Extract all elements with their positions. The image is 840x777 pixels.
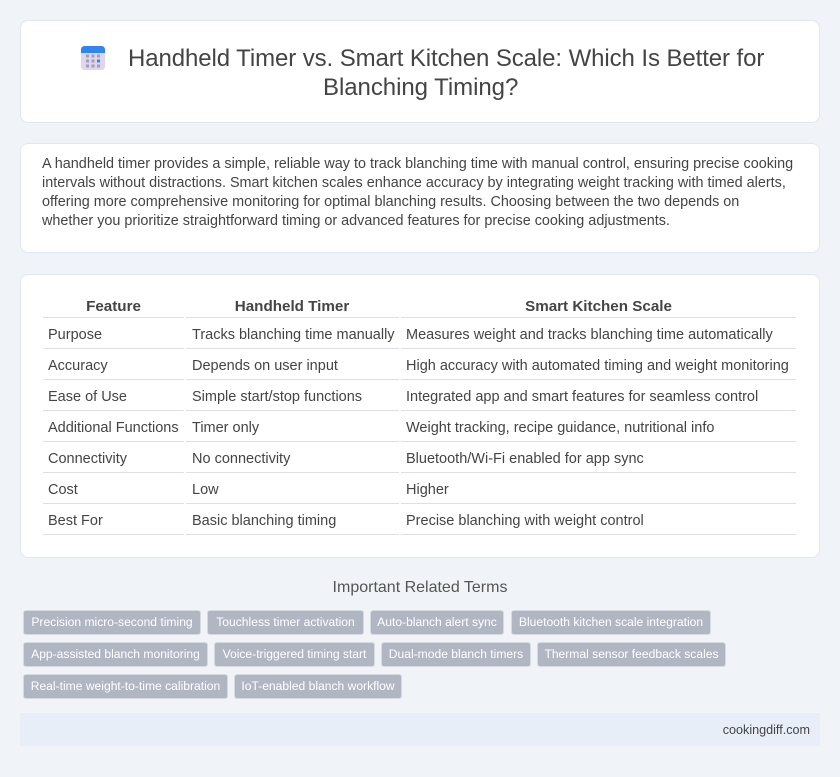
heading: main title: Blanching Timing?	[323, 74, 518, 101]
table: comparison	[43, 298, 796, 535]
table: comparison: Depends on user input	[192, 358, 338, 374]
panel: comparison table	[20, 274, 820, 558]
table: comparison: Tracks blanching time manually	[192, 327, 395, 343]
table: comparison: High accuracy with automated timing and weight monitoring	[406, 358, 789, 374]
tag group: related terms: Real-time weight-to-time calibration	[31, 679, 220, 693]
tag group: related terms: Bluetooth kitchen scale integration	[519, 615, 703, 629]
tag group: related terms: Dual-mode blanch timers	[389, 647, 523, 661]
table: comparison: Precise blanching with weight control	[406, 513, 644, 529]
heading: related terms: Important Related Terms	[333, 579, 507, 596]
table: comparison: Basic blanching timing	[192, 513, 336, 529]
table: comparison: Feature	[86, 298, 141, 315]
table: comparison: Low	[192, 482, 219, 498]
table: comparison: Accuracy	[48, 358, 108, 374]
tag group: related terms: Voice-triggered timing start	[223, 647, 366, 661]
table: comparison: Integrated app and smart features for seamless control	[406, 389, 758, 405]
heading: main title: Handheld Timer vs. Smart Kitchen Scale: Which Is Better for	[128, 45, 764, 72]
text block: introduction	[42, 156, 793, 229]
tag group: related terms: IoT-enabled blanch workflow	[241, 679, 395, 693]
table: comparison: No connectivity	[192, 451, 290, 467]
tag group: related terms	[23, 610, 726, 699]
tag group: related terms: Auto-blanch alert sync	[377, 615, 497, 629]
table: comparison: Handheld Timer	[235, 298, 349, 315]
table: comparison: Weight tracking, recipe guidance, nutritional info	[406, 420, 714, 436]
tag group: related terms: Thermal sensor feedback scales	[544, 647, 719, 661]
text block: introduction: intervals without distractions. Smart kitchen scales enhance accuracy by integrating weight tracking with timed alerts,	[42, 175, 786, 191]
table: comparison: Measures weight and tracks blanching time automatically	[406, 327, 773, 343]
text block: introduction: whether you prioritize straightforward timing or advanced features for precise cooking adjustments.	[42, 213, 670, 229]
table: comparison: Connectivity	[48, 451, 127, 467]
table: comparison: Simple start/stop functions	[192, 389, 362, 405]
table: comparison: Ease of Use	[48, 389, 127, 405]
table: comparison: Higher	[406, 482, 449, 498]
table: comparison: Cost	[48, 482, 78, 498]
table: comparison: Smart Kitchen Scale	[525, 298, 672, 315]
text block: introduction: offering more comprehensive monitoring for optimal blanching results. Choosing between the two depends on	[42, 194, 739, 210]
panel: title header	[20, 20, 820, 123]
table: comparison: Best For	[48, 513, 103, 529]
table: comparison: Timer only	[192, 420, 259, 436]
tag group: related terms: App-assisted blanch monitoring	[31, 647, 200, 661]
table: comparison: Bluetooth/Wi-Fi enabled for app sync	[406, 451, 644, 467]
tag group: related terms: Touchless timer activation	[216, 615, 355, 629]
panel: introduction	[20, 143, 820, 253]
table: comparison: Purpose	[48, 327, 102, 343]
icon: calendar	[81, 46, 105, 70]
text block: introduction: A handheld timer provides a simple, reliable way to track blanching time with manual control, ensuring precise cooking	[42, 156, 793, 172]
heading: main title	[128, 45, 764, 101]
tag group: related terms: Precision micro-second timing	[31, 615, 193, 629]
footer: source credit: cookingdiff.com	[723, 723, 810, 737]
table: comparison: Additional Functions	[48, 420, 179, 436]
footer bar	[20, 713, 820, 746]
